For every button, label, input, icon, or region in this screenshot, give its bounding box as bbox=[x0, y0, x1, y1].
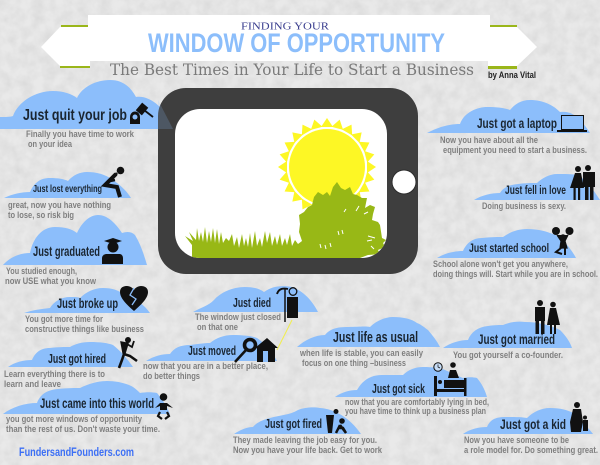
panel: just got married bbox=[443, 300, 572, 360]
illustration: sun, grass, tree bbox=[185, 118, 386, 258]
heading: Just fell in love bbox=[505, 185, 566, 197]
description: Now you have about all the bbox=[440, 135, 538, 145]
description line 2: on that one bbox=[197, 322, 238, 332]
panel: just moved bbox=[143, 335, 278, 381]
heading: Just life as usual bbox=[333, 330, 418, 346]
description line 2: constructive things like business bbox=[25, 324, 144, 334]
panel: just broke up bbox=[24, 286, 150, 334]
description: great, now you have nothing bbox=[8, 200, 111, 210]
description: now that you are comfortably lying in bed, bbox=[345, 397, 489, 407]
description: You studied enough, bbox=[6, 266, 77, 276]
heading: Just died bbox=[233, 296, 271, 310]
heading: Just graduated bbox=[33, 244, 100, 259]
icon: fired people bbox=[326, 409, 346, 433]
description line 2: Now you have your life back. Get to work bbox=[233, 445, 383, 455]
description: now that you are in a better place, bbox=[143, 361, 268, 371]
description line 2: than the rest of us. Don't waste your time. bbox=[6, 424, 160, 434]
description: They made leaving the job easy for you. bbox=[233, 435, 377, 445]
description line 2: focus on one thing –business bbox=[302, 358, 406, 368]
heading: Just came into this world bbox=[40, 396, 154, 411]
panel: just got hired bbox=[4, 337, 137, 389]
panel: just died bbox=[193, 286, 318, 332]
description line 2: learn and leave bbox=[4, 379, 61, 389]
panel: just came into this world bbox=[3, 381, 173, 434]
description: School alone won't get you anywhere, bbox=[433, 259, 568, 269]
description: when life is stable, you can easily bbox=[299, 348, 424, 358]
heading: Just got fired bbox=[265, 417, 322, 431]
cloud bbox=[193, 286, 318, 312]
heading: Just moved bbox=[188, 344, 236, 358]
description: you got more windows of opportunity bbox=[6, 414, 143, 424]
description: Doing business is sexy. bbox=[482, 201, 566, 211]
description: You got yourself a co-founder. bbox=[453, 350, 563, 360]
cloud bbox=[0, 80, 175, 129]
icon: broken heart bbox=[120, 286, 148, 311]
icon: graduate bbox=[102, 238, 123, 264]
website link: FundersandFounders.com bbox=[19, 447, 134, 459]
cloud bbox=[24, 288, 150, 313]
cloud bbox=[474, 174, 600, 200]
description line 2: do better things bbox=[143, 371, 200, 381]
description: Learn everything there is to bbox=[4, 369, 105, 379]
byline: by Anna Vital bbox=[488, 70, 536, 80]
home button bbox=[392, 170, 416, 194]
heading: Just lost everything bbox=[33, 183, 102, 195]
icon: parent and kid bbox=[570, 402, 588, 432]
icon: couple bbox=[570, 165, 595, 200]
cloud bbox=[146, 335, 277, 361]
title: finding your: FINDING YOUR bbox=[241, 20, 330, 32]
heading: Just got a kid bbox=[500, 417, 566, 432]
panel: just lost everything bbox=[4, 167, 131, 220]
title banner bbox=[41, 15, 537, 69]
panel: just quit your job bbox=[0, 80, 175, 149]
heading: Just quit your job bbox=[23, 107, 127, 124]
cloud bbox=[234, 407, 361, 434]
cloud bbox=[443, 322, 572, 348]
icon: cheerleader bbox=[552, 227, 574, 255]
cloud bbox=[335, 367, 487, 397]
panel: just started school bbox=[433, 227, 598, 279]
panel: just fell in love bbox=[474, 165, 600, 211]
cloud bbox=[3, 381, 170, 414]
description line 2: now USE what you know bbox=[5, 276, 97, 286]
heading: Just got hired bbox=[48, 352, 106, 366]
cloud bbox=[463, 408, 593, 434]
icon: running person bbox=[119, 337, 137, 368]
icon: thinking person bbox=[105, 167, 124, 197]
heading: Just started school bbox=[469, 243, 549, 255]
icon: baby bbox=[155, 393, 173, 419]
panel: just got a laptop bbox=[427, 100, 590, 155]
title: window of opportunity: WINDOW OF OPPORTUNITY bbox=[148, 28, 445, 58]
icon: key and house bbox=[235, 338, 278, 362]
panel: just got sick bbox=[335, 362, 489, 416]
description: The window just closed bbox=[195, 312, 281, 322]
icon: married couple bbox=[535, 300, 560, 334]
heading: Just got sick bbox=[372, 382, 425, 396]
tablet bbox=[158, 88, 418, 274]
icon: sick bed, clock and nurse bbox=[434, 362, 466, 396]
cloud bbox=[3, 215, 147, 265]
panel: just got a kid bbox=[463, 402, 598, 455]
cloud bbox=[427, 100, 590, 133]
cloud bbox=[297, 317, 440, 347]
description: You got more time for bbox=[25, 314, 103, 324]
description: Now you have someone to be bbox=[464, 435, 569, 445]
icon: reaper bbox=[277, 288, 298, 322]
description line 2: to lose, so risk big bbox=[8, 210, 74, 220]
panel: just got fired bbox=[233, 407, 383, 455]
panel: just life as usual bbox=[297, 317, 440, 368]
subtitle: The Best Times in Your Life to Start a Business bbox=[110, 61, 474, 79]
cloud bbox=[8, 342, 133, 367]
heading: Just got married bbox=[478, 332, 555, 347]
light ray line bbox=[277, 320, 292, 350]
cloud bbox=[437, 229, 576, 258]
heading: Just broke up bbox=[57, 296, 118, 311]
description line 2: you have time to think up a business plan bbox=[345, 406, 486, 416]
icon: gavel bbox=[130, 103, 153, 124]
panel: just graduated bbox=[3, 215, 147, 286]
icon: laptop bbox=[557, 116, 587, 132]
description: Finally you have time to work bbox=[26, 129, 135, 139]
cloud bbox=[4, 172, 131, 198]
heading: Just got a laptop bbox=[477, 116, 557, 131]
description line 2: on your idea bbox=[28, 139, 73, 149]
